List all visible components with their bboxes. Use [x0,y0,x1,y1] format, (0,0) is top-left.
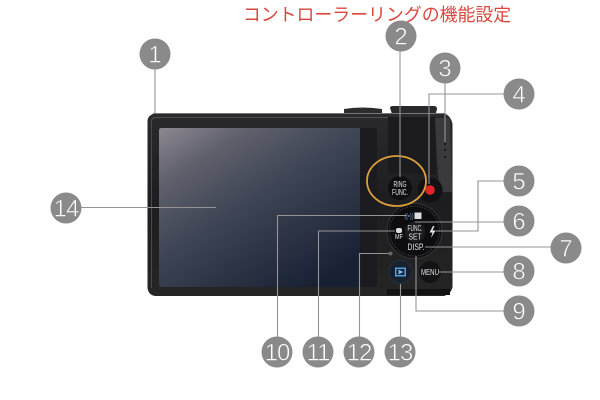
grip side [435,118,452,192]
badge 6: 6 [512,208,526,236]
camera body [148,113,452,296]
badge 3: 3 [438,56,452,82]
title: コントローラーリングの機能設定 [243,5,511,25]
RING FUNC button [388,176,412,200]
badge 5 [504,166,534,196]
badge 8: 8 [512,258,526,286]
badge 11: 11 [307,340,330,366]
lower edge [387,289,450,295]
leader lines [66,36,566,352]
badge 3 [430,52,460,84]
control dial: MF [395,234,403,241]
badge 7 [550,232,582,264]
badge 12 [344,336,374,368]
shutter dial [390,106,437,117]
control dial: SET [408,232,422,242]
control dial: ((•)) [404,214,414,220]
badge 13: 13 [388,340,413,366]
RING FUNC button: FUNC. [392,188,408,197]
badge 2: 2 [394,24,408,50]
number badges [50,20,582,368]
badge 12: 12 [347,340,372,366]
badge 1 [140,38,170,70]
screen glass [159,128,377,287]
badge 6 [504,206,534,236]
screen display [159,128,360,287]
badge 10: 10 [265,340,290,366]
ring highlight [367,156,426,206]
movie button [418,178,442,202]
badge 10 [262,336,292,368]
badge 2 [386,20,416,52]
badge 7: 7 [559,236,573,262]
badge 4 [504,78,534,110]
camera [148,106,452,296]
control dial [387,204,442,258]
badge 11 [302,336,334,368]
indicator lamp [388,252,392,256]
badge 13 [384,336,416,368]
badge 9 [504,296,534,326]
badge 9: 9 [512,298,526,326]
MENU button [418,260,442,284]
badge 4: 4 [512,82,526,108]
badge 5: 5 [512,168,526,196]
badge 14: 14 [54,196,79,222]
speaker holes [444,143,446,158]
playback button [389,260,412,284]
MENU button: MENU [421,267,439,277]
body top edge highlight [155,112,444,114]
badge 1: 1 [148,42,162,68]
badge 8 [504,256,534,286]
badge 14 [50,192,82,224]
control dial: FUNC. [408,223,422,233]
top dial [344,108,382,113]
control dial: DISP. [408,242,424,252]
RING FUNC button: RING [394,180,406,189]
body inner rim [152,118,388,288]
grip panel [388,117,436,174]
